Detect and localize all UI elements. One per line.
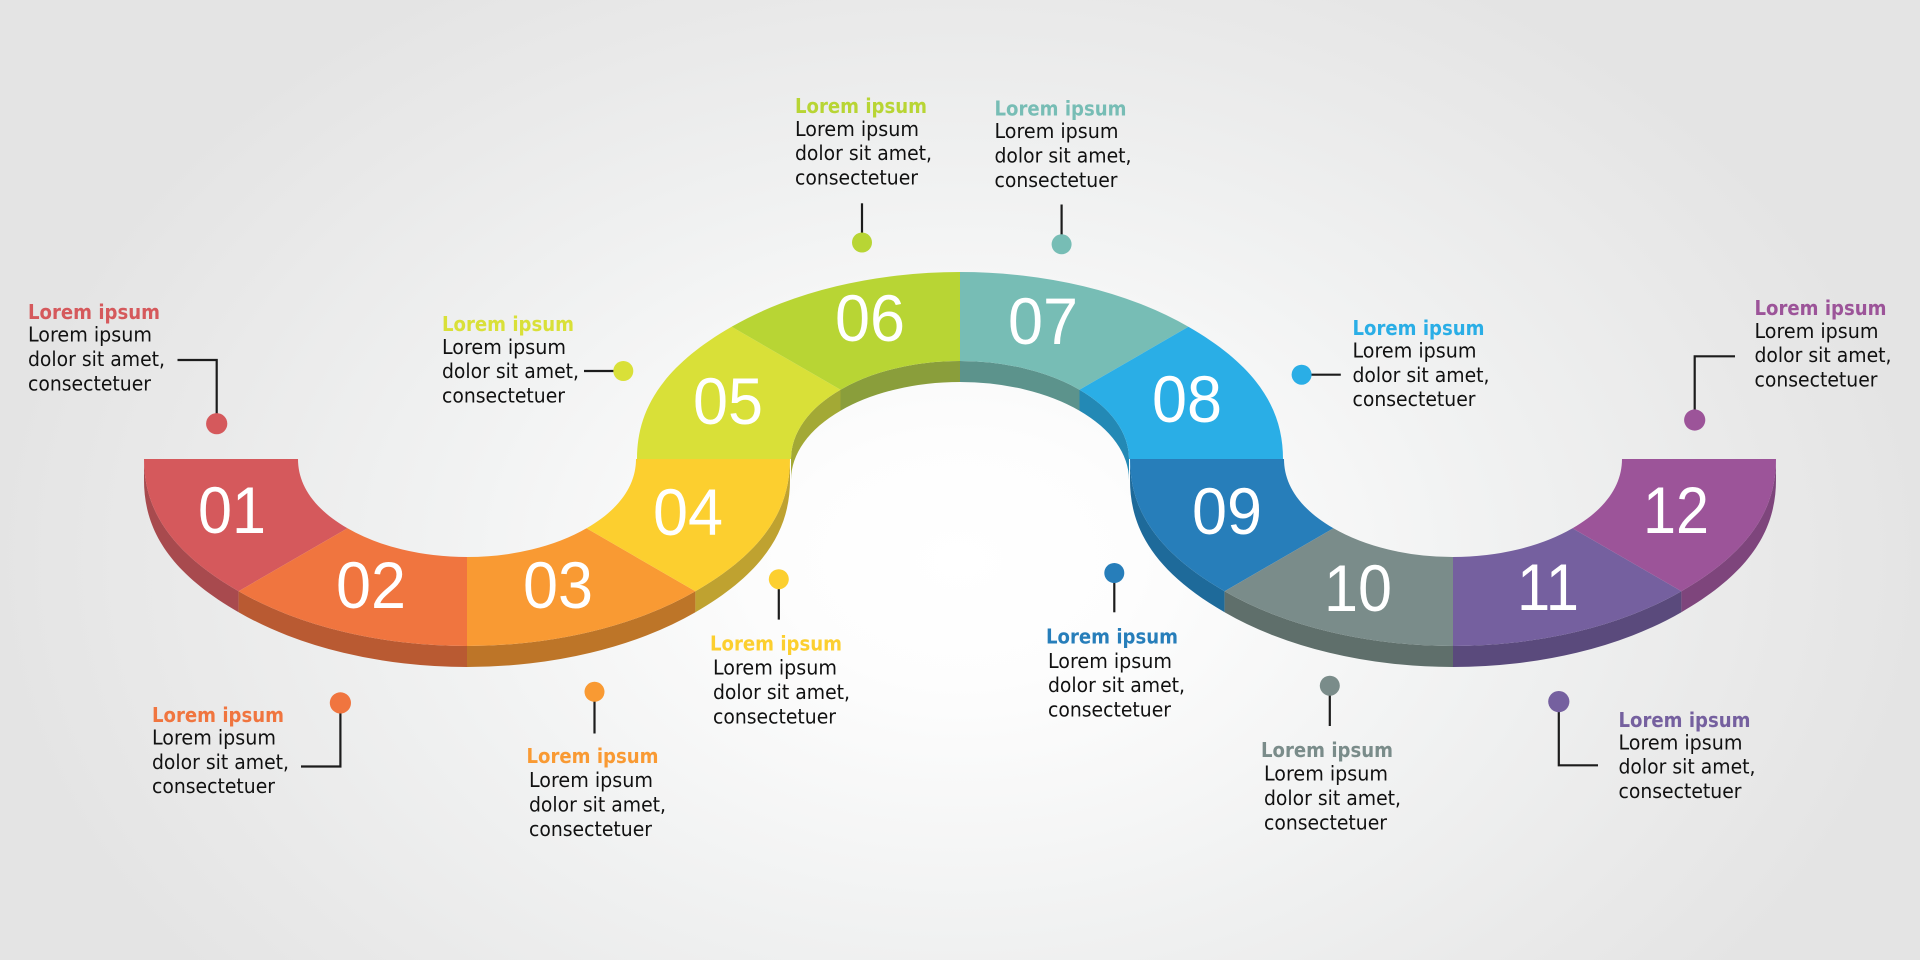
callout 10: consectetuer	[1264, 810, 1388, 834]
segment 03	[467, 528, 695, 667]
callout 02: dolor sit amet,	[152, 750, 289, 774]
callout 07: Lorem ipsum	[994, 96, 1126, 120]
callout 03: consectetuer	[529, 817, 653, 841]
segment 11: 11	[1517, 550, 1579, 624]
callout 07: dolor sit amet,	[994, 144, 1132, 168]
callout 08: Lorem ipsum	[1352, 316, 1484, 340]
segment 06: 06	[835, 281, 905, 355]
callout 04: Lorem ipsum	[713, 656, 837, 680]
callout 02: Lorem ipsum	[152, 725, 276, 749]
segment 08	[1080, 327, 1283, 480]
callout 05: consectetuer	[442, 384, 566, 408]
callout 09: Lorem ipsum	[1048, 649, 1172, 673]
callout 10: Lorem ipsum	[1264, 762, 1388, 786]
callout 01: dolor sit amet,	[28, 347, 165, 371]
callout 04: Lorem ipsum	[710, 631, 842, 655]
callout 12	[1684, 296, 1892, 431]
callout 04	[710, 569, 850, 728]
callout 01: consectetuer	[28, 371, 152, 395]
callout 06: Lorem ipsum	[795, 94, 927, 118]
segment 10: 10	[1324, 551, 1392, 625]
callout 05	[442, 312, 633, 408]
segment 06	[732, 272, 960, 411]
callout 02: consectetuer	[152, 774, 276, 798]
callout 12: Lorem ipsum	[1754, 319, 1878, 343]
callout 12: consectetuer	[1754, 368, 1878, 392]
callout 11: Lorem ipsum	[1618, 708, 1750, 732]
callout 03: Lorem ipsum	[526, 744, 658, 768]
segment 09	[1130, 459, 1334, 612]
segment 07	[960, 272, 1188, 411]
callout 06: dolor sit amet,	[795, 141, 932, 165]
callout 01: Lorem ipsum	[28, 322, 152, 346]
callout 08: dolor sit amet,	[1352, 363, 1490, 387]
callout 02	[152, 692, 351, 798]
callout 08	[1292, 316, 1490, 411]
segment 03: 03	[523, 548, 593, 622]
callout 06: consectetuer	[795, 166, 919, 190]
segment 04	[586, 459, 790, 612]
segment 11	[1453, 528, 1681, 667]
segment 01: 01	[198, 473, 266, 547]
callout 11: Lorem ipsum	[1618, 730, 1742, 754]
callout 08: Lorem ipsum	[1352, 338, 1476, 362]
callout 11	[1548, 691, 1756, 803]
segment 12	[1572, 459, 1776, 612]
segment 09: 09	[1192, 474, 1262, 548]
callout 12: Lorem ipsum	[1754, 296, 1886, 320]
segment 01	[144, 459, 348, 612]
segment 05	[637, 327, 840, 480]
callout 01: Lorem ipsum	[28, 300, 160, 324]
callout 07	[994, 96, 1132, 254]
segment 05: 05	[693, 364, 763, 438]
callout 08: consectetuer	[1352, 387, 1476, 411]
callout 12: dolor sit amet,	[1754, 343, 1892, 367]
callout 04: dolor sit amet,	[713, 680, 850, 704]
callout 02: Lorem ipsum	[152, 703, 284, 727]
callout 03: dolor sit amet,	[529, 793, 666, 817]
segment 02	[239, 528, 467, 667]
callout 10	[1261, 676, 1401, 834]
callout 09: consectetuer	[1048, 698, 1172, 722]
callout 04: consectetuer	[713, 704, 837, 728]
segment 12: 12	[1643, 473, 1709, 547]
callout 09: dolor sit amet,	[1048, 673, 1185, 697]
callout 05: dolor sit amet,	[442, 359, 579, 383]
segment 02: 02	[336, 548, 406, 622]
segment 04: 04	[653, 475, 723, 549]
callout 05: Lorem ipsum	[442, 312, 574, 336]
callout 03	[526, 682, 666, 841]
callout 03: Lorem ipsum	[529, 768, 653, 792]
callout 06: Lorem ipsum	[795, 117, 919, 141]
callout 10: Lorem ipsum	[1261, 738, 1393, 762]
segment 07: 07	[1008, 284, 1078, 358]
callout 05: Lorem ipsum	[442, 335, 566, 359]
callout 09	[1046, 563, 1185, 722]
callout 06	[795, 94, 932, 252]
chart: twelve segment wave arc	[144, 272, 1776, 667]
callout 10: dolor sit amet,	[1264, 786, 1401, 810]
callout 09: Lorem ipsum	[1046, 625, 1178, 649]
segment 08: 08	[1152, 362, 1222, 436]
callout 11: consectetuer	[1618, 779, 1742, 803]
callout 11: dolor sit amet,	[1618, 755, 1756, 779]
callout 01	[28, 300, 227, 434]
callout 07: Lorem ipsum	[994, 119, 1118, 143]
callout 07: consectetuer	[994, 168, 1118, 192]
segment 10	[1225, 528, 1453, 667]
